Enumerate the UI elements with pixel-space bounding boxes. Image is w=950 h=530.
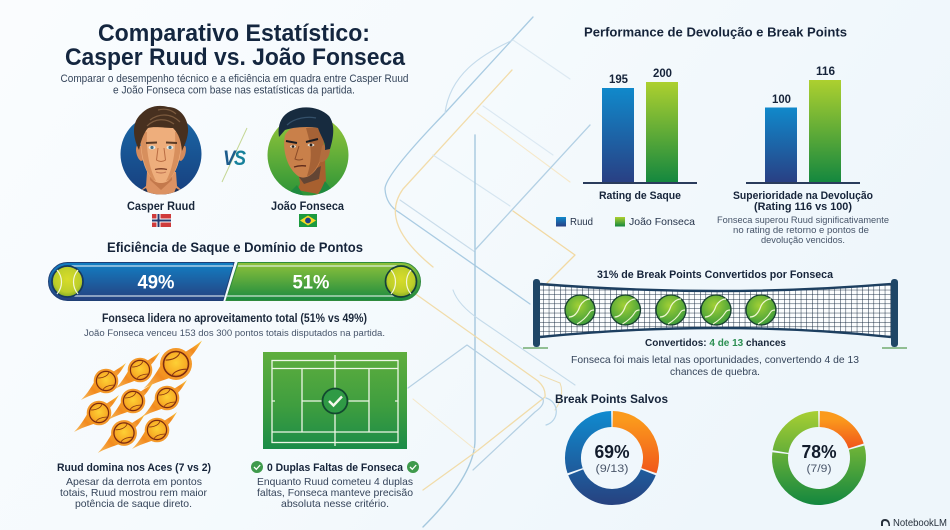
text block: return note: Fonseca superou Ruud significativamente	[717, 215, 889, 225]
value 49%: 49%	[138, 272, 175, 294]
green segment	[226, 262, 420, 300]
label: João Fonseca: João Fonseca	[271, 199, 344, 213]
right tennis ball	[386, 266, 416, 297]
bar chart: return rating: 100	[772, 92, 791, 106]
bar chart: serve rating: 195	[609, 72, 628, 86]
text block: return note: devolução vencidos.	[761, 235, 845, 245]
icon: tennis net with five balls	[523, 279, 907, 348]
subtitle: e João Fonseca com base nas estatísticas da partida.	[113, 84, 355, 96]
icon: tennis court with check	[263, 352, 407, 449]
portrait: João Fonseca	[268, 107, 348, 198]
bar chart: serve rating: Rating de Saque	[599, 190, 681, 202]
portrait: Casper Ruud	[120, 106, 202, 200]
caption: point share	[84, 313, 385, 339]
bar chart: return rating: (Rating 116 vs 100)	[754, 201, 852, 213]
comparison bar: 49% vs 51%	[48, 262, 420, 300]
text block: double faults: absoluta nesse critério.	[281, 499, 389, 510]
balls	[565, 295, 595, 325]
flag: Brazil	[299, 214, 317, 227]
bar chart: return rating	[733, 64, 873, 213]
title: Comparativo Estatístico:	[98, 20, 370, 47]
title	[65, 20, 405, 71]
heading: break points converted: 31% de Break Points Convertidos por Fonseca	[597, 269, 834, 281]
text block: return note	[717, 215, 889, 245]
title: Casper Ruud vs. João Fonseca	[65, 44, 405, 71]
text block: break points note: chances de quebra.	[670, 367, 760, 378]
donut chart: Ruud 69%: 69%	[594, 441, 630, 462]
bar chart: return rating: Superioridade na Devolução	[733, 190, 873, 202]
text block: aces: potência de saque direto.	[75, 499, 192, 510]
caption: point share: João Fonseca venceu 153 dos 300 pontos totais disputados na partida.	[84, 328, 385, 339]
left post	[533, 279, 540, 347]
label: Casper Ruud: Casper Ruud	[127, 199, 195, 213]
legend: João Fonseca	[629, 216, 695, 228]
text block: aces: Apesar da derrota em pontos	[66, 477, 202, 488]
text block: double faults	[251, 461, 419, 510]
text block: aces	[57, 462, 211, 510]
value 51%: 51%	[292, 272, 330, 294]
text block: aces: Ruud domina nos Aces (7 vs 2)	[57, 462, 211, 474]
text block: aces: totais, Ruud mostrou rem maior	[60, 488, 208, 499]
text block: double faults: faltas, Fonseca manteve precisão	[257, 488, 413, 499]
bar chart: serve rating	[583, 66, 697, 202]
heading: serve efficiency: Eficiência de Saque e Domínio de Pontos	[107, 239, 363, 255]
donut chart: Ruud 69%	[573, 419, 651, 497]
left tennis ball	[52, 266, 83, 297]
text block: double faults: Enquanto Ruud cometeu 4 duplas	[257, 477, 413, 488]
donut chart: Ruud 69%: (9/13)	[596, 463, 628, 475]
logo: NotebookLM: NotebookLM	[893, 518, 947, 529]
heading: return performance: Performance de Devolução e Break Points	[584, 26, 847, 40]
icon: flaming aces	[74, 341, 202, 453]
flag: Norway	[152, 214, 171, 227]
text block: break points note	[571, 355, 859, 378]
caption: point share: Fonseca lidera no aproveitamento total (51% vs 49%)	[102, 313, 367, 325]
vs badge: S	[234, 147, 246, 170]
bar chart: serve rating: 200	[653, 66, 672, 80]
legend: Ruud	[570, 216, 593, 228]
legend	[556, 216, 695, 228]
donut chart: Fonseca 78%	[780, 419, 858, 497]
donut chart: Fonseca 78%: 78%	[802, 441, 836, 462]
text block: double faults: 0 Duplas Faltas de Fonseca	[267, 462, 404, 474]
heading: break points saved: Break Points Salvos	[555, 392, 668, 406]
text block: return note: no rating de retorno e pontos de	[733, 225, 869, 235]
bar chart: return rating: 116	[816, 64, 835, 78]
blue segment	[48, 262, 234, 300]
text block: break points note: Fonseca foi mais letal nas oportunidades, convertendo 4 de 13	[571, 355, 859, 366]
vs badge: V	[223, 147, 237, 170]
subtitle	[60, 73, 409, 96]
subtitle: Comparar o desempenho técnico e a eficiência em quadra entre Casper Ruud	[60, 73, 409, 85]
right post	[891, 279, 898, 347]
icon: check left	[251, 461, 263, 473]
donut chart: Fonseca 78%: (7/9)	[806, 463, 832, 475]
vs badge	[222, 128, 247, 182]
icon: check right	[407, 461, 419, 473]
callout: converted count: Convertidos: 4 de 13 chances	[645, 337, 786, 349]
